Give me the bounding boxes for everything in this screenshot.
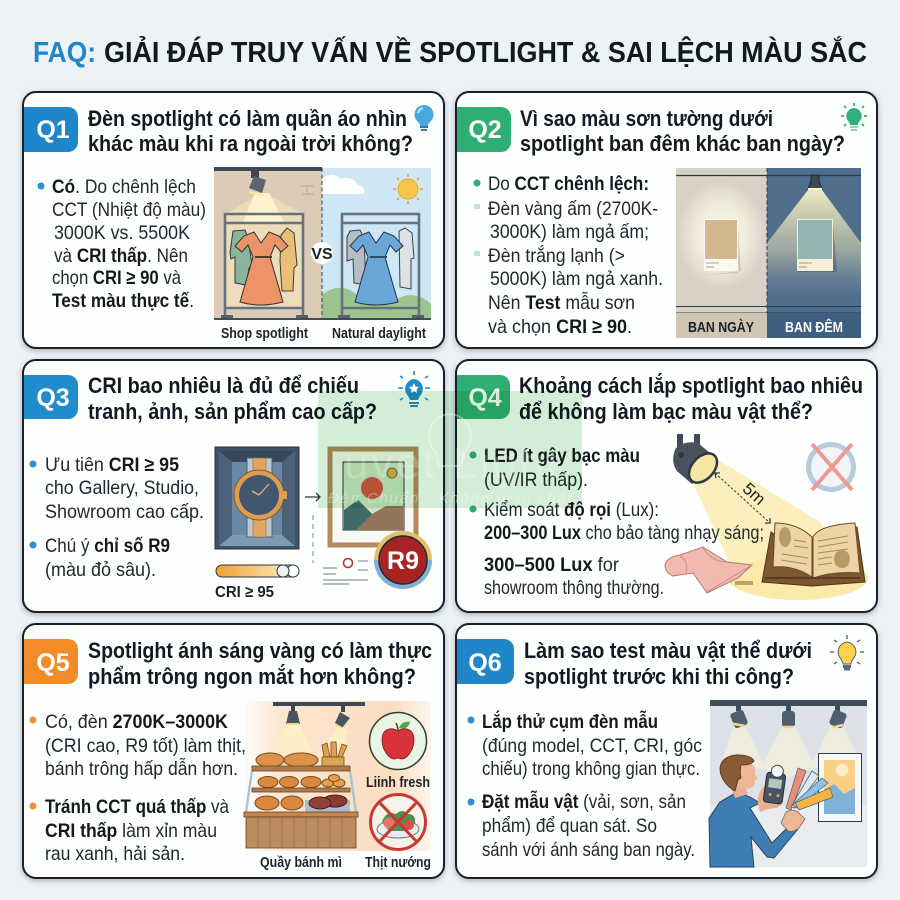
badge: Q2: [457, 107, 511, 152]
text block: Q5 answer: rau xanh, hải sản.: [45, 843, 185, 865]
label: CRI >= 95: CRI ≥ 95: [215, 584, 274, 601]
heading: Q2: Vì sao màu sơn tường dưới: [520, 106, 773, 131]
text block: Q5 answer: Có, đèn 2700K–3000K: [45, 711, 228, 733]
text block: Q5 answer: [30, 711, 246, 865]
illustration: shop spotlight vs daylight: [214, 167, 431, 320]
text block: Q3 answer: [30, 454, 204, 581]
text block: Q4 answer: 300–500 Lux for: [484, 554, 619, 576]
badge: Q4: Q4: [468, 384, 502, 412]
heading: Q1: Đèn spotlight có làm quần áo nhìn: [88, 106, 407, 131]
heading: Q3: CRI bao nhiêu là đủ để chiếu: [88, 373, 359, 398]
heading: Q2: spotlight ban đêm khác ban ngày?: [520, 131, 845, 156]
text block: Q4 answer: Kiểm soát độ rọi (Lux):: [484, 499, 659, 521]
text block: Q6 answer: Đặt mẫu vật (vải, sơn, sản: [482, 789, 686, 813]
badge: Q1: [24, 107, 78, 152]
heading: Q1: [88, 106, 413, 156]
text block: Q2 answer: Đèn trắng lạnh (>: [488, 244, 625, 267]
icon: blue bulb: [414, 105, 434, 131]
text block: Q4 answer: 200–300 Lux cho bảo tàng nhạy sáng;: [484, 522, 764, 544]
icon: star bulb: [398, 371, 430, 407]
heading: Q3: tranh, ảnh, sản phẩm cao cấp?: [88, 399, 377, 424]
badge: Q3: [24, 375, 78, 419]
badge: Q5: Q5: [36, 649, 70, 677]
badge: Q6: [457, 639, 514, 684]
text block: Q1 answer: và CRI thấp. Nên: [54, 245, 188, 267]
text block: Q5 answer: CRI thấp làm xỉn màu: [45, 820, 217, 842]
text block: Q2 answer: [474, 173, 663, 338]
badge: Q5: [24, 639, 78, 684]
watermark: Đèn Chuẩn - Không gian chất: [328, 490, 573, 507]
watermark: uvet Light: [344, 439, 559, 488]
illustration: watch display case: [215, 447, 299, 549]
heading: Q6: spotlight trước khi thi công?: [524, 664, 794, 689]
label: Quay banh mi: Quầy bánh mì: [260, 854, 342, 871]
text block: Q2 answer: Nên Test mẫu sơn: [488, 291, 635, 314]
text block: Q3 answer: Showroom cao cấp.: [45, 501, 204, 523]
badge: R9: [374, 531, 432, 589]
label: Thit nuong: Thịt nướng: [365, 854, 431, 871]
panel: Q1: [23, 92, 444, 348]
text block: Q6 answer: (đúng model, CCT, CRI, góc: [482, 735, 702, 757]
text block: Q3 answer: cho Gallery, Studio,: [45, 477, 199, 499]
panel: Q6: [456, 624, 877, 878]
illustration: shop spotlight vs daylight: VS: [311, 246, 333, 263]
text block: Q6 answer: sánh với ánh sáng ban ngày.: [482, 839, 695, 861]
illustration: paint swatch day vs night: [676, 168, 861, 338]
text block: Q2 answer: 5000K) làm ngả xanh.: [490, 268, 663, 290]
heading: Q6: Làm sao test màu vật thể dưới: [524, 638, 812, 663]
badge: R9: R9: [387, 547, 419, 575]
text block: Q4 answer: (UV/IR thấp).: [484, 469, 588, 491]
text block: Q1 answer: Có. Do chênh lệch: [52, 176, 196, 198]
text block: Q2 answer: và chọn CRI ≥ 90.: [488, 316, 632, 338]
panel: Q3: [23, 360, 444, 612]
heading: Q4: [519, 373, 863, 424]
badge: Q1: Q1: [36, 116, 70, 144]
text block: Q4 answer: [470, 445, 764, 599]
panel: Q2: [456, 92, 877, 348]
legend lines: [323, 558, 368, 584]
text block: Q2 answer: Do CCT chênh lệch:: [488, 173, 649, 195]
text block: Q6 answer: chiếu) trong không gian thực.: [482, 758, 700, 780]
text block: Q5 answer: (CRI cao, R9 tốt) làm thịt,: [45, 735, 246, 757]
text block: Q6 answer: Lắp thử cụm đèn mẫu: [482, 709, 658, 733]
text block: Q2 answer: 3000K) làm ngả ấm;: [490, 221, 649, 243]
heading: Q5: phẩm trông ngon mắt hơn không?: [88, 664, 416, 689]
text block: Q6 answer: [468, 709, 702, 861]
heading: Q6: [524, 638, 812, 689]
text block: Q3 answer: Chú ý chỉ số R9: [45, 535, 170, 557]
illustration: spotlight beam on book: 5m: [739, 479, 769, 509]
heading: Q3: [88, 373, 377, 424]
watermark: [318, 391, 582, 508]
heading: Q1: khác màu khi ra ngoài trời không?: [88, 131, 413, 156]
text block: Q1 answer: chọn CRI ≥ 90 và: [52, 267, 181, 289]
icon: yellow bulb: [830, 635, 864, 670]
text block: Q1 answer: [38, 176, 206, 312]
badge: Q6: Q6: [468, 649, 502, 677]
illustration: spotlight beam on book: [665, 434, 868, 600]
badge: Q2: Q2: [468, 116, 502, 144]
icon: apple: [370, 712, 426, 770]
text block: Q4 answer: showroom thông thường.: [484, 577, 664, 599]
title: FAQ:: [33, 37, 96, 69]
illustration: bakery counter: [244, 701, 431, 851]
illustration: framed picture: [313, 449, 416, 563]
text block: Q6 answer: phẩm) để quan sát. So: [482, 815, 657, 837]
illustration: testing color samples: [709, 700, 867, 867]
icon: green bulb: [841, 103, 867, 131]
text block: Q4 answer: LED ít gây bạc màu: [484, 445, 640, 467]
heading: Q5: Spotlight ánh sáng vàng có làm thực: [88, 638, 432, 663]
heading: Q4: để không làm bạc màu vật thể?: [519, 399, 813, 424]
text block: Q5 answer: Tránh CCT quá thấp và: [45, 796, 229, 818]
panel: Q4: [456, 360, 877, 612]
text block: Q3 answer: (màu đỏ sâu).: [45, 559, 156, 581]
heading: Q2: [520, 106, 845, 156]
text block: Q1 answer: CCT (Nhiệt độ màu): [52, 199, 206, 221]
text block: Q3 answer: Ưu tiên CRI ≥ 95: [45, 454, 179, 476]
label: natural daylight: Natural daylight: [332, 325, 426, 342]
text block: Q2 answer: Đèn vàng ấm (2700K-: [488, 198, 658, 220]
text block: Q1 answer: 3000K vs. 5500K: [54, 222, 190, 244]
label: shop spotlight: Shop spotlight: [221, 325, 308, 342]
icon: crossed-out food: [370, 794, 426, 850]
text block: Q5 answer: bánh trông hấp dẫn hơn.: [45, 757, 238, 780]
badge: Q4: [457, 375, 510, 419]
slider: CRI: [216, 565, 299, 577]
illustration: paint swatch day vs night: BAN NGÀY: [688, 319, 754, 336]
text block: Q1 answer: Test màu thực tế.: [52, 290, 194, 312]
label: Liinh fresh: Liinh fresh: [366, 774, 430, 791]
arrow: [305, 493, 320, 501]
heading: Q5: [88, 638, 432, 689]
illustration: paint swatch day vs night: BAN ĐÊM: [785, 318, 843, 336]
panel: Q5: [23, 624, 444, 878]
badge: Q3: Q3: [36, 384, 70, 412]
